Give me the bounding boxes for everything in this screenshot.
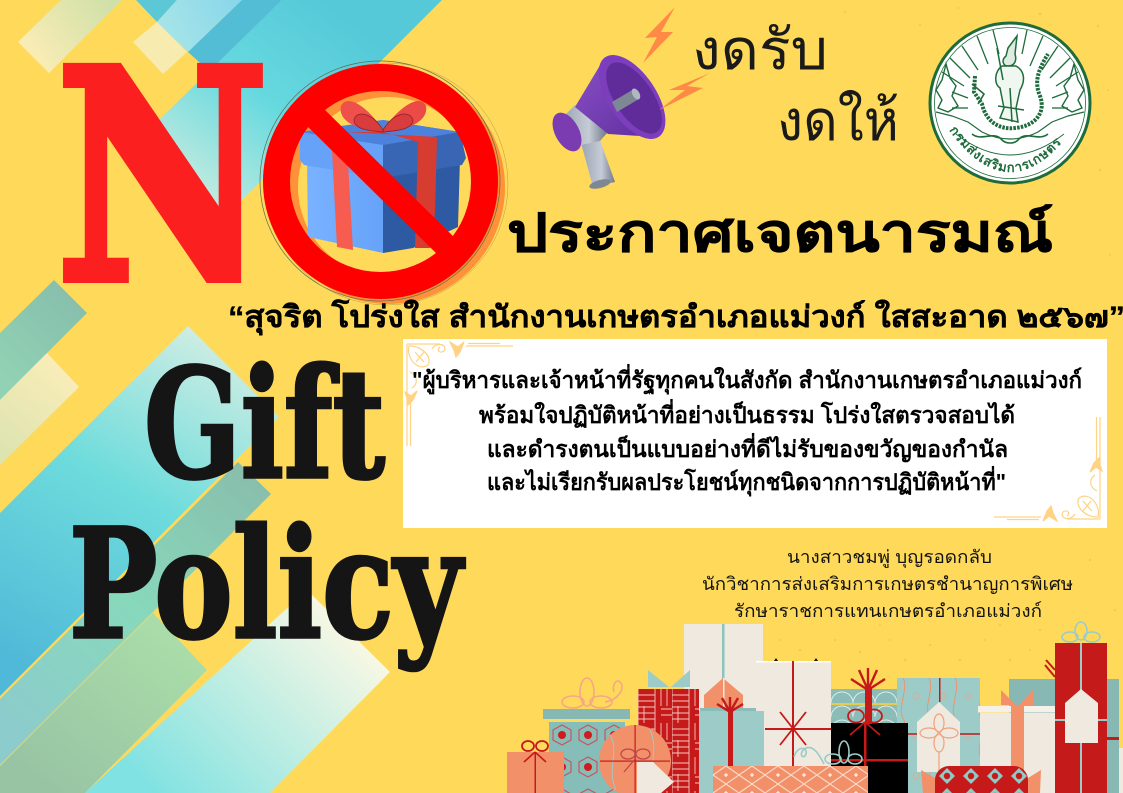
icon: department seal: [928, 22, 1092, 184]
red parquet gift: [638, 670, 699, 793]
statement lines: "ผู้บริหารและเจ้าหน้าที่รัฐทุกคนในสังกัด สำนักงานเกษตรอำเภอแม่วงก์: [412, 363, 1082, 395]
hex-patterned gift: [543, 678, 630, 793]
heading: no giving: งดให้: [777, 89, 899, 152]
panel: declaration statement: [403, 339, 1107, 528]
ornament: top-left corner: [405, 342, 513, 446]
icon: department seal: กรมส่งเสริมการเกษตร: [949, 127, 1061, 172]
teal scale gift: [831, 689, 897, 725]
red ribbon burst bow: [848, 668, 885, 735]
wave-patterned teal gift: [897, 678, 980, 793]
side ornaments: [936, 64, 958, 112]
seal lettering: [949, 130, 1072, 172]
back teal gift: [1009, 660, 1119, 793]
signature block: นักวิชาการส่งเสริมการเกษตรชำนาญการพิเศษ: [702, 574, 1073, 594]
decorative speckle texture: [779, 7, 1116, 661]
statement lines: พร้อมใจปฏิบัติหน้าที่อย่างเป็นธรรม โปร่งใสตรวจสอบได้: [479, 398, 1015, 428]
white gift with peach ribbon: [978, 690, 1058, 793]
heading letter N: N: [56, 6, 269, 348]
white star gift: [756, 658, 831, 793]
plain teal gift: [699, 697, 764, 793]
icon: megaphone: [547, 44, 679, 191]
candy-wrapped gift: [921, 766, 1041, 793]
round peach gift with tag: [599, 725, 674, 793]
prohibition sign: [276, 78, 484, 286]
icon: prohibited gift box: [260, 61, 508, 305]
ornament: bottom-right corner: [994, 417, 1102, 521]
signature block: นางสาวชมพู่ บุญรอดกลับ: [787, 547, 992, 568]
thin outline rings: [260, 61, 500, 301]
heading: Policy: Policy: [69, 495, 465, 673]
gift box: [300, 101, 466, 253]
peach gift: [507, 741, 564, 793]
statement lines: และไม่เรียกรับผลประโยชน์ทุกชนิดจากการปฏิบัติหน้าที่": [487, 465, 1006, 497]
bottom banner arcs: [936, 112, 1084, 139]
diagonal color bands: [0, 0, 442, 793]
peach lattice gift: [713, 766, 868, 793]
sun rays: [942, 30, 1078, 108]
heading: Gift: Gift: [144, 335, 385, 513]
illustration: pile of gift boxes: [507, 622, 1123, 793]
signature block: รักษาราชการแทนเกษตรอำเภอแม่วงก์: [734, 601, 1042, 621]
signature block: [702, 547, 1073, 621]
icon: lightning bolts: [643, 7, 710, 110]
teal curl bow: [794, 741, 862, 764]
main heading: declaration of intent: ประกาศเจตนารมณ์: [507, 204, 1053, 263]
heading: no receiving: งดรับ: [692, 18, 828, 81]
statement lines: [412, 363, 1082, 497]
tall red gift: [1055, 622, 1123, 793]
tall white gift: [684, 624, 763, 714]
slogan: “สุจริต โปร่งใส สำนักงานเกษตรอำเภอแม่วงก์ ใสสะอาด ๒๕๖๗”: [228, 298, 1123, 336]
black gift: [831, 723, 908, 793]
orange halo ring: [284, 84, 492, 290]
deity and naga: [972, 36, 1048, 128]
statement lines: และดำรงตนเป็นแบบอย่างที่ดีไม่รับของขวัญของกำนัล: [487, 432, 1008, 463]
